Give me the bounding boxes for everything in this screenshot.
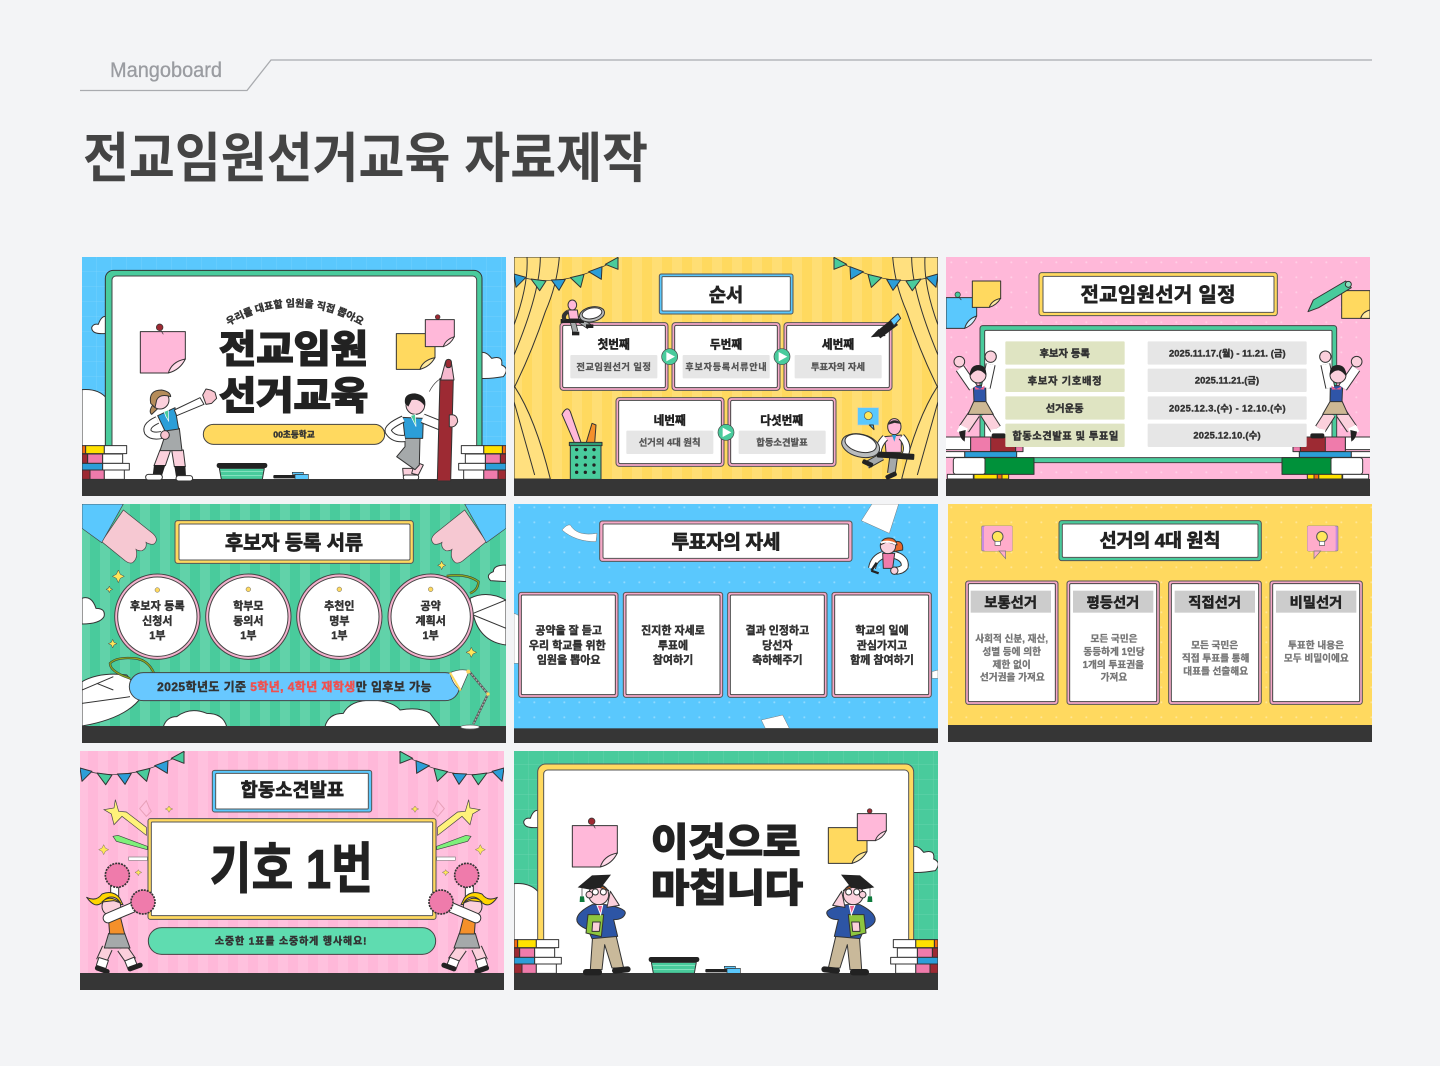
principle card 1: 보통선거 (984, 594, 1037, 611)
slide 2: contents (514, 257, 938, 496)
attitude card 1: 임원을 뽑아요 (537, 653, 601, 667)
slogan pill (148, 928, 436, 954)
attitude card 1: 공약을 잘 듣고 (535, 624, 602, 637)
principle card 1 (966, 581, 1058, 704)
card: fourth: 네번째 (654, 413, 686, 427)
heading box (212, 770, 372, 812)
floor (948, 725, 1372, 742)
circle 4: 계획서 (415, 613, 446, 627)
attitude card 1: 우리 학교를 위한 (529, 638, 606, 652)
principle card 4: 비밀선거 (1290, 594, 1342, 611)
main title (219, 329, 368, 418)
pen icon (871, 314, 901, 339)
slide 2 background (514, 257, 938, 496)
circle 1 (115, 574, 200, 659)
cheerleaders (87, 863, 497, 975)
heading box: 전교임원선거 일정 (1080, 284, 1235, 307)
page title: 전교임원선거교육 자료제작 (83, 129, 648, 189)
circle 3 (297, 574, 382, 659)
floor (514, 728, 938, 743)
principle card 3: 모든 국민은 (1191, 640, 1238, 651)
schedule row 2: 후보자 기호배정 (1028, 374, 1102, 387)
lightbulb speech card (858, 408, 879, 430)
man with magnifier (839, 419, 914, 480)
candidate number board (148, 819, 436, 919)
attitude card 2: 진지한 자세로 (641, 623, 705, 637)
yellow board frame (538, 764, 914, 984)
heading box (1039, 273, 1277, 316)
circle 3: 추천인 (324, 599, 354, 613)
slide 8 background (514, 751, 938, 990)
principle card 1: 사회적 신분, 재산, (975, 633, 1048, 645)
slide 3 background (946, 257, 1370, 496)
heading box: 후보자 등록 서류 (225, 531, 363, 554)
circle 4 (388, 574, 473, 659)
slide 7 background (80, 751, 504, 990)
closing message: 마칩니다 (651, 868, 803, 910)
circle 4: 공약 (421, 600, 441, 613)
card: second (672, 323, 780, 390)
school name pill: 00초등학교 (273, 429, 315, 440)
attitude card 2: 투표에 (658, 639, 688, 652)
slide 5 background (514, 504, 938, 743)
slide 4 background (82, 504, 506, 743)
floor (82, 479, 506, 496)
schedule row 3: 2025.12.3.(수) - 12.10.(수) (1169, 403, 1286, 413)
cheering girls (954, 351, 1362, 442)
student girl pointing (146, 389, 217, 481)
schedule row 1: 후보자 등록 (1039, 347, 1090, 360)
book stacks (82, 446, 506, 479)
attitude card 3: 당선자 (762, 639, 792, 652)
bunting (80, 751, 504, 785)
principle card 2: 동등하게 1인당 (1083, 646, 1145, 658)
principle card 1: 성별 등에 의한 (982, 646, 1041, 658)
lightbulb card right (1307, 526, 1338, 559)
slide 3: schedule (943, 257, 1373, 496)
closing message: 이것으로 (651, 823, 800, 865)
heading box (659, 274, 793, 314)
circle 1: 1부 (149, 629, 165, 642)
floor (514, 479, 938, 496)
arrow buttons (662, 349, 790, 440)
sticky notes left (946, 281, 1001, 328)
card: first (560, 323, 668, 390)
slide 5: voter attitude (514, 504, 938, 743)
right curtain (893, 257, 938, 479)
card: first: 전교임원선거 일정 (576, 361, 651, 372)
schedule row 3: 선거운동 (1046, 402, 1084, 415)
bursts left (99, 800, 173, 876)
circle 1: 신청서 (142, 613, 172, 627)
heading box: 합동소견발표 (241, 780, 344, 801)
attitude card 3: 결과 인정하고 (745, 623, 809, 637)
principle card 2: 모든 국민은 (1090, 634, 1138, 645)
sparkle stars (106, 561, 477, 657)
desk lamp (450, 670, 490, 729)
principle card 3: 직접 투표를 통해 (1182, 652, 1250, 664)
circle 1: 후보자 등록 (130, 599, 185, 613)
slide 6 background (948, 504, 1372, 742)
curved subtitle: 우리를 대표할 임원을 직접 뽑아요 (226, 298, 364, 326)
flying papers (514, 504, 938, 728)
basin and pen (217, 463, 308, 479)
circle 2: 학부모 (233, 599, 263, 613)
closing message (651, 823, 803, 910)
school name pill (203, 424, 385, 444)
schedule row 2 (1005, 369, 1307, 392)
main title: 전교임원 (219, 329, 368, 371)
attitude card 4: 관심가지고 (857, 638, 907, 652)
bunting (514, 257, 938, 291)
circle 3: 1부 (331, 629, 347, 642)
circle 2: 동의서 (233, 614, 263, 627)
heading box (1059, 521, 1261, 561)
eligibility pill: 2025학년도 기준 5학년, 4학년 재학생만 입후보 가능 (157, 679, 431, 694)
book piles (943, 437, 1373, 479)
bursts right (411, 800, 485, 876)
circle 2: 1부 (240, 629, 256, 642)
brand tab line (80, 60, 1372, 90)
green board frame (105, 270, 482, 490)
card: third: 세번째 (822, 338, 854, 352)
attitude card 3: 축하해주기 (752, 653, 803, 667)
attitude card 2 (623, 592, 723, 697)
basin and pen (649, 957, 740, 973)
attitude card 3 (728, 592, 827, 697)
slide 8: closing (514, 751, 938, 990)
attitude card 4: 함께 참여하기 (850, 653, 914, 667)
floor (946, 479, 1370, 496)
principle card 2: 가져요 (1101, 672, 1127, 684)
card: fourth: 선거의 4대 원칙 (639, 437, 701, 448)
wire colour (110, 575, 478, 678)
green board (980, 326, 1337, 463)
principle card 3 (1169, 581, 1261, 704)
principle card 2: 1개의 투표권을 (1083, 659, 1144, 671)
principle card 2 (1067, 581, 1159, 704)
circle 4: 1부 (423, 629, 439, 642)
heading box: 순서 (709, 285, 743, 306)
slide 6: four principles (948, 504, 1372, 742)
heading box: 선거의 4대 원칙 (1099, 530, 1220, 551)
card: third: 투표자의 자세 (811, 361, 865, 372)
schedule row 3 (1005, 396, 1307, 420)
card: fourth (616, 398, 724, 466)
pen cup (562, 409, 602, 479)
main title: 선거교육 (219, 376, 368, 418)
pencil and note right (1308, 281, 1370, 318)
principle card 4 (1270, 581, 1362, 704)
principle card 2: 평등선거 (1087, 594, 1139, 611)
card: first: 첫번째 (598, 338, 630, 352)
schedule row 2: 2025.11.21.(금) (1195, 376, 1259, 386)
hands (82, 504, 506, 563)
lightbulb card left (982, 526, 1012, 559)
left curtain (514, 257, 559, 479)
principle card 3: 직접선거 (1188, 594, 1241, 611)
floor (80, 973, 504, 990)
slide 7: joint speech (80, 751, 504, 990)
principle card 1: 제한 없이 (993, 659, 1031, 671)
clouds and hill (82, 316, 506, 446)
book stacks (514, 940, 938, 973)
principle card 1: 선거권을 가져요 (980, 672, 1045, 684)
slide 1 background (82, 257, 506, 446)
attitude card 2: 참여하기 (653, 653, 693, 667)
graduates (577, 875, 875, 975)
heading box (175, 521, 413, 563)
schedule row 1 (1005, 341, 1307, 365)
heading box: 투표자의 자세 (671, 532, 780, 554)
card: fifth: 다섯번째 (760, 413, 803, 427)
slide 4: required documents (82, 504, 506, 743)
slide 1: cover (82, 257, 506, 496)
schedule row 4: 합동소견발표 및 투표일 (1012, 429, 1118, 442)
principle card 4: 모두 비밀이에요 (1284, 652, 1349, 664)
schedule row 4 (1005, 424, 1307, 447)
circle 3: 명부 (329, 614, 349, 627)
clouds (82, 565, 506, 727)
card: fifth: 합동소견발표 (756, 437, 808, 448)
document circles (115, 574, 473, 659)
heading box (600, 521, 852, 561)
floor (514, 973, 938, 990)
brand label: Mangoboard (110, 59, 222, 82)
eligibility pill (129, 673, 459, 701)
floor (82, 726, 506, 743)
principle card 3: 대표를 선출해요 (1183, 665, 1248, 677)
card: second: 두번째 (710, 338, 742, 352)
slogan pill: 소중한 1표를 소중하게 행사해요! (215, 935, 366, 948)
attitude card 4 (832, 592, 931, 697)
student boy with giant pencil (388, 359, 458, 481)
girl with headband (871, 538, 905, 574)
principle card 4: 투표한 내용은 (1288, 639, 1344, 651)
schedule row 4: 2025.12.10.(수) (1193, 431, 1261, 441)
card: fifth (728, 398, 836, 466)
white leaves (82, 595, 506, 726)
attitude card 4: 학교의 일에 (855, 623, 909, 637)
candidate number board: 기호 1번 (210, 838, 373, 900)
attitude card 1 (519, 592, 618, 697)
card: second: 후보자등록서류안내 (685, 361, 767, 372)
card: third (784, 323, 892, 390)
clouds and hill (514, 810, 938, 973)
schedule row 1: 2025.11.17.(월) - 11.21. (금) (1169, 347, 1286, 358)
pinned sticky notes (572, 809, 886, 867)
small man with magnifier (561, 300, 606, 335)
circle 2 (206, 574, 291, 659)
pinned sticky notes (140, 315, 454, 373)
wires (110, 575, 478, 678)
